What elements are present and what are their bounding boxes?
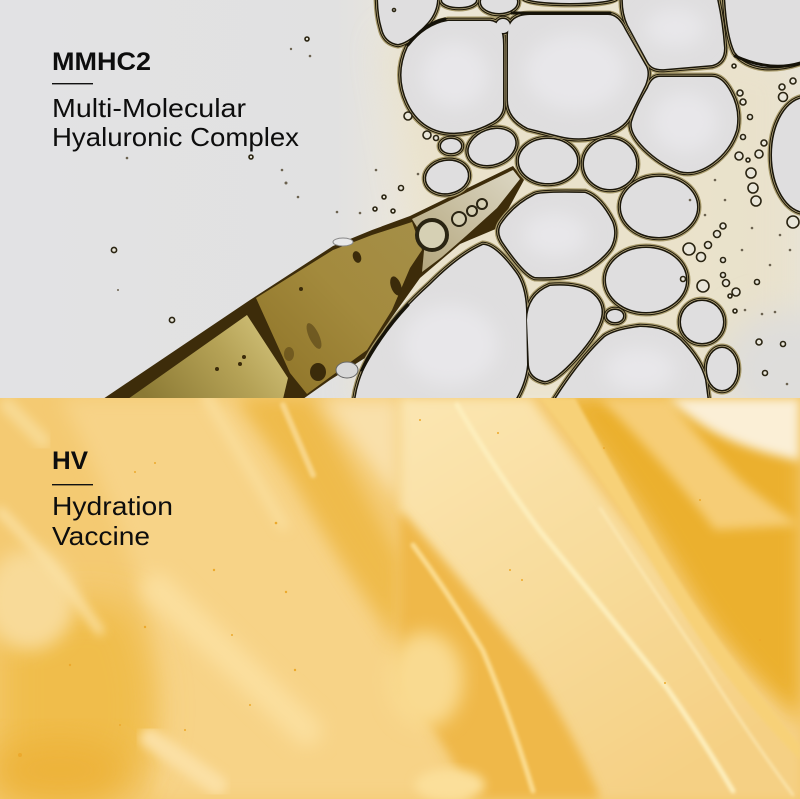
glossy highlights	[0, 398, 793, 795]
dark oil blobs	[215, 250, 404, 381]
description: Multi-Molecular Hyaluronic Complex	[52, 93, 299, 152]
description: Hydration Vaccine: Hydration	[52, 491, 173, 521]
description: Hydration Vaccine: Vaccine	[52, 521, 150, 551]
left cream folds	[0, 398, 470, 799]
cream base	[0, 398, 800, 799]
oil stream outline	[103, 166, 524, 399]
oil stream	[103, 166, 524, 399]
bubble fills	[355, 0, 800, 403]
description: Multi-Molecular Hyaluronic Complex: Hyaluronic Complex	[52, 122, 299, 152]
pale lower oil section	[128, 315, 288, 399]
rule	[52, 484, 93, 485]
lower-middle pale patch	[387, 632, 463, 728]
description: Multi-Molecular Hyaluronic Complex: Multi-Molecular	[52, 93, 246, 123]
heading: HV: HV	[52, 447, 88, 475]
bubble walls	[355, 0, 800, 403]
clear upper oil section	[412, 170, 520, 272]
panel: oil bubbles photo	[0, 0, 800, 430]
description: Hydration Vaccine	[52, 491, 173, 551]
lower-middle dark band	[400, 511, 600, 799]
text block: MMHC2	[52, 48, 299, 152]
heading: MMHC2: MMHC2	[52, 48, 151, 76]
orange specks	[18, 419, 761, 757]
right pale band	[400, 398, 800, 799]
top-right pale corner	[668, 398, 800, 461]
bubbles inside stream	[417, 199, 487, 250]
text block: HV	[52, 447, 173, 551]
dark wall shadows	[362, 13, 800, 370]
grey lower-right wash	[730, 317, 800, 398]
cream oil tint around bubbles	[390, 10, 800, 392]
right dark band	[560, 398, 800, 715]
right pale fold	[600, 398, 800, 530]
tiny bubbles	[111, 8, 799, 376]
bubbles cluster	[355, 0, 800, 403]
rule	[52, 83, 93, 84]
photo background	[0, 0, 800, 398]
dark middle oil section	[256, 222, 422, 394]
panel: golden cream texture	[0, 398, 800, 799]
faint specks	[117, 48, 791, 385]
droplets at stream edge	[333, 238, 353, 246]
bubble highlights	[402, 8, 718, 392]
